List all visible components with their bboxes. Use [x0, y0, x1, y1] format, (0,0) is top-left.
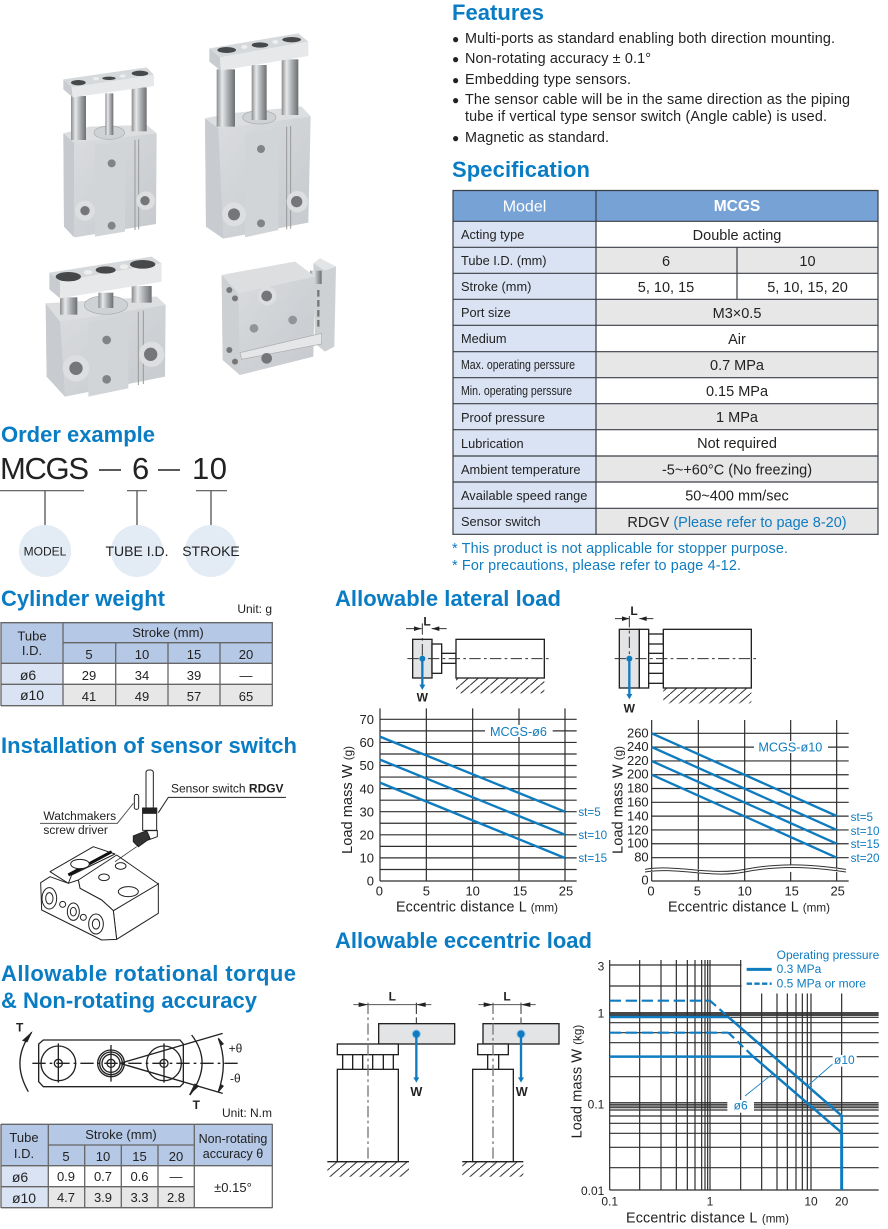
- row values: 0.15 MPa: [706, 384, 769, 400]
- row labels: Min. operating perssure: [461, 383, 572, 398]
- rotational torque table: 0.9: [57, 1169, 75, 1184]
- heading: Installation of sensor switch: Installation of sensor switch: [1, 733, 297, 758]
- heading: Features: Features: [452, 0, 544, 25]
- cylinder weight table: 65: [239, 689, 253, 704]
- y tick labels: 50: [360, 758, 374, 773]
- callout: watchmakers screw driver: Watchmakers: [43, 809, 116, 823]
- rotational torque table: 2.8: [167, 1190, 185, 1205]
- x tick labels: 15: [513, 884, 527, 899]
- rotational torque table: ø10: [12, 1190, 36, 1206]
- cylinder photo 2: [205, 33, 311, 239]
- y tick labels: 40: [360, 781, 374, 796]
- load curves: [610, 1001, 842, 1190]
- product photos: four guide cylinders: [46, 33, 336, 397]
- rotational torque table: 3.9: [94, 1190, 112, 1205]
- y tick labels: 0.1: [588, 1097, 605, 1111]
- cylinder weight table: 20: [239, 647, 253, 662]
- footnotes: * This product is not applicable for stopper purpose.: [452, 541, 788, 557]
- cylinder weight table: 41: [82, 689, 96, 704]
- model code: 6: [132, 451, 149, 486]
- table header row: Model: [503, 198, 546, 216]
- model code: MCGS: [0, 451, 89, 486]
- callout ø10: ø10: [834, 1053, 855, 1067]
- x tick labels: 5: [694, 884, 701, 899]
- row values: [627, 228, 848, 531]
- table header row: [503, 198, 760, 216]
- rotational torque table: ±0.15°: [214, 1180, 252, 1195]
- callout: sensor switch RDGV: [158, 782, 286, 813]
- circle labels: STROKE: [182, 543, 240, 559]
- cylinder weight table: 5: [85, 647, 93, 662]
- footnotes: [452, 541, 788, 574]
- cylinder weight table: —: [240, 668, 252, 683]
- y tick labels: 0.01: [581, 1184, 605, 1198]
- y tick labels: 20: [360, 827, 374, 842]
- rotational torque table: 3.3: [130, 1190, 149, 1205]
- pressure legend: 0.3 MPa: [777, 962, 822, 976]
- model code: [0, 451, 227, 486]
- rotational torque table: 15: [132, 1149, 147, 1164]
- row labels: Port size: [461, 305, 511, 320]
- row values: 1 MPa: [716, 410, 759, 426]
- x tick labels: 15: [784, 884, 799, 899]
- y tick labels: 140: [627, 808, 649, 823]
- y tick labels: [627, 725, 649, 888]
- row values: -5~+60°C (No freezing): [662, 462, 812, 478]
- heading: Specification: Specification: [452, 157, 590, 182]
- y tick labels: 70: [360, 712, 374, 727]
- x tick labels: 1: [707, 1195, 714, 1209]
- cylinder weight table: 10: [135, 647, 149, 662]
- rotational torque drawing: [16, 1021, 243, 1112]
- y tick labels: 120: [627, 822, 649, 837]
- footnotes: * For precautions, please refer to page 4-12.: [452, 558, 741, 574]
- callout: watchmakers screw driver: screw driver: [43, 823, 108, 837]
- row values: 5, 10, 15: [638, 280, 694, 296]
- y tick labels: 3: [598, 960, 605, 974]
- x tick labels: 0.1: [601, 1195, 618, 1209]
- x tick labels: [601, 1195, 849, 1209]
- y tick labels: 10: [360, 851, 374, 866]
- lateral load drawing ø10: [615, 604, 757, 716]
- row labels: Stroke (mm): [461, 279, 531, 294]
- y tick labels: 200: [627, 767, 649, 782]
- eccentric load drawing: wide: L: [389, 990, 396, 1004]
- rotational torque table: Stroke (mm): [85, 1127, 157, 1142]
- rotational torque drawing: +θ: [229, 1041, 243, 1055]
- y tick labels: 260: [627, 725, 649, 740]
- cylinder weight table: 29: [82, 668, 96, 683]
- callout: sensor switch RDGV: Sensor switch RDGV: [171, 782, 284, 796]
- rotational torque table: I.D.: [14, 1146, 34, 1161]
- cylinder weight table: [1, 622, 272, 706]
- features list: ●: [452, 52, 459, 66]
- y axis title: Load mass W (kg): [570, 1025, 586, 1139]
- heading: Cylinder weight: Cylinder weight: [1, 586, 166, 611]
- row labels: Proof pressure: [461, 410, 545, 425]
- y tick labels: 100: [627, 836, 649, 851]
- features list: ●: [452, 73, 459, 87]
- row labels: Max. operating perssure: [461, 357, 575, 372]
- y tick labels: [360, 712, 374, 889]
- x tick labels: 10: [737, 884, 752, 899]
- row labels: Available speed range: [461, 488, 587, 503]
- y axis title: Load mass W (g): [340, 746, 356, 854]
- x tick labels: 25: [830, 884, 845, 899]
- x axis title: Eccentric distance L(mm): [626, 1211, 789, 1227]
- row labels: Acting type: [461, 227, 524, 242]
- y tick labels: 0: [641, 873, 649, 888]
- cylinder photo 1: [63, 67, 157, 237]
- specification table: [452, 190, 878, 535]
- callout ø6: [727, 1073, 773, 1113]
- x tick labels: 10: [804, 1195, 818, 1209]
- lateral load drawing ø10: L: [630, 604, 638, 618]
- row values: Air: [728, 332, 746, 348]
- rotational torque table: 20: [169, 1149, 183, 1164]
- unit label: Unit: N.m: [222, 1106, 272, 1120]
- rotational torque table: —: [170, 1169, 182, 1184]
- row values: 10: [799, 254, 816, 270]
- y tick labels: 240: [627, 739, 649, 754]
- row values: Not required: [697, 436, 777, 452]
- y tick labels: 30: [360, 804, 374, 819]
- heading: Order example: Order example: [1, 422, 155, 447]
- chart label MCGS-ø10: MCGS-ø10: [758, 741, 822, 755]
- features list: ●: [452, 131, 459, 145]
- rotational torque table: 4.7: [57, 1190, 75, 1205]
- features list: The sensor cable will be in the same direction as the piping: [465, 92, 850, 108]
- chart label MCGS-ø6: MCGS-ø6: [490, 725, 547, 739]
- y tick labels: 60: [360, 735, 374, 750]
- y tick labels: 1: [598, 1006, 605, 1020]
- heading: Allowable eccentric load: Allowable eccentric load: [335, 928, 592, 953]
- circle labels: MODEL: [24, 544, 67, 558]
- row values: 0.7 MPa: [710, 358, 765, 374]
- row values: RDGV (Please refer to page 8-20): [627, 515, 847, 531]
- lateral load drawing ø10: W: [624, 702, 636, 716]
- eccentric load drawing: narrow: W: [516, 1085, 528, 1099]
- stroke labels: st=10: [578, 829, 608, 842]
- features list: Non-rotating accuracy ± 0.1°: [465, 51, 651, 67]
- stroke labels: st=15: [578, 852, 607, 865]
- pressure legend: Operating pressure: [777, 948, 880, 962]
- heading: Allowable rotational torque and non-rotating accuracy: & Non-rotating accuracy: [1, 988, 258, 1013]
- x tick labels: 0: [647, 884, 655, 899]
- rotational torque table: 5: [62, 1149, 70, 1164]
- heading: Allowable rotational torque and non-rotating accuracy: Allowable rotational torque: [1, 961, 296, 986]
- rotational torque drawing: T: [16, 1021, 24, 1035]
- row values: 5, 10, 15, 20: [767, 280, 848, 296]
- cylinder photo 3: [46, 257, 166, 397]
- x tick labels: [376, 884, 573, 899]
- rotational torque table: accuracy θ: [203, 1147, 263, 1161]
- stroke labels: st=10: [851, 825, 880, 838]
- row labels: Ambient temperature: [461, 462, 580, 477]
- x tick labels: 20: [835, 1195, 849, 1209]
- order code diagram: [0, 451, 240, 577]
- y tick labels: 180: [627, 781, 649, 796]
- stroke labels: st=15: [851, 838, 880, 851]
- cylinder weight table: Stroke (mm): [132, 625, 204, 640]
- features list: Multi-ports as standard enabling both direction mounting.: [465, 31, 835, 47]
- rotational torque table: Tube: [9, 1130, 39, 1145]
- row labels: Lubrication: [461, 436, 524, 451]
- rotational torque table: 10: [96, 1149, 110, 1164]
- sensor switch installation drawing: [40, 770, 286, 940]
- heading: Allowable rotational torque and non-rotating accuracy: [1, 961, 296, 1013]
- sensor switch: [115, 770, 157, 862]
- cylinder weight table: 15: [187, 647, 201, 662]
- cylinder weight table: 49: [135, 689, 149, 704]
- row labels: [461, 227, 587, 529]
- features list: Magnetic as standard.: [465, 130, 609, 146]
- rotational torque table: 0.7: [94, 1169, 112, 1184]
- x tick labels: 5: [423, 884, 430, 899]
- cylinder photo 4: [222, 258, 336, 375]
- pressure legend: [742, 947, 880, 993]
- stroke labels: st=20: [851, 852, 880, 865]
- features list: ●: [452, 93, 459, 107]
- callout: watchmakers screw driver: [40, 803, 133, 837]
- lateral load chart ø6: [340, 708, 608, 916]
- rotational torque table: 0.6: [130, 1169, 149, 1184]
- rotational torque drawing: T: [193, 1098, 201, 1112]
- row labels: Medium: [461, 331, 507, 346]
- x tick labels: 0: [376, 884, 383, 899]
- cylinder weight table: I.D.: [22, 643, 42, 658]
- y tick labels: 220: [627, 753, 649, 768]
- stroke labels: [578, 806, 608, 865]
- eccentric load drawing: narrow: [462, 990, 559, 1177]
- row values: M3×0.5: [713, 306, 761, 322]
- eccentric load drawing: wide: W: [410, 1085, 422, 1099]
- circle labels: TUBE I.D.: [105, 543, 169, 559]
- load lines: [652, 733, 837, 858]
- cylinder weight table: 39: [187, 668, 201, 683]
- rotational torque drawing: -θ: [230, 1072, 241, 1086]
- x tick labels: [647, 884, 845, 899]
- x axis title: Eccentric distance L(mm): [396, 900, 558, 916]
- cylinder weight table: 57: [187, 689, 201, 704]
- cylinder weight table: 34: [135, 668, 149, 683]
- cylinder weight table: ø10: [20, 687, 44, 703]
- x tick labels: 10: [465, 884, 480, 899]
- cylinder body drawing: [41, 847, 158, 940]
- x axis title: Eccentric distance L(mm): [668, 900, 830, 916]
- heading: Allowable lateral load: Allowable lateral load: [335, 586, 561, 611]
- rotational torque table: ø6: [12, 1169, 28, 1185]
- stroke labels: st=5: [578, 806, 601, 819]
- features list: ●: [452, 32, 459, 46]
- features list: Embedding type sensors.: [465, 72, 631, 88]
- features list: [452, 31, 850, 146]
- table header row: MCGS: [714, 198, 760, 215]
- model code: 10: [192, 451, 227, 486]
- cylinder weight table: ø6: [20, 667, 36, 683]
- unit label: Unit: g: [237, 602, 272, 616]
- circle labels: [19, 525, 240, 577]
- y axis title: Load mass W (g): [611, 746, 627, 854]
- lateral load drawing ø6: L: [423, 615, 431, 629]
- row values: 6: [662, 254, 670, 270]
- y tick labels: 160: [627, 794, 649, 809]
- axis break: [645, 865, 846, 874]
- pressure legend: 0.5 MPa or more: [777, 977, 866, 991]
- stroke labels: st=5: [851, 811, 873, 824]
- callout ø6: ø6: [734, 1098, 748, 1112]
- y tick labels: 0: [367, 874, 374, 889]
- row values: Double acting: [693, 228, 781, 244]
- eccentric load log chart: [570, 947, 880, 1227]
- load lines: [380, 737, 565, 858]
- row labels: Sensor switch: [461, 514, 541, 529]
- stroke labels: [851, 811, 880, 865]
- eccentric load drawing: wide: [327, 990, 455, 1177]
- lateral load drawing ø6: [406, 615, 549, 705]
- callout ø10: [807, 1053, 857, 1087]
- lateral load drawing ø6: W: [417, 691, 429, 705]
- rotational torque table: [1, 1124, 272, 1208]
- eccentric load drawing: narrow: L: [503, 990, 511, 1004]
- y tick labels: 80: [634, 850, 649, 865]
- cylinder weight table: Tube: [17, 628, 47, 644]
- x tick labels: 25: [559, 884, 573, 899]
- lateral load chart ø10: [611, 720, 880, 916]
- row values: 50~400 mm/sec: [685, 488, 789, 504]
- y tick labels: [581, 960, 605, 1198]
- row labels: Tube I.D. (mm): [461, 253, 547, 268]
- rotational torque table: Non-rotating: [199, 1132, 267, 1146]
- features list: tube if vertical type sensor switch (Angle cable) is used.: [465, 109, 827, 125]
